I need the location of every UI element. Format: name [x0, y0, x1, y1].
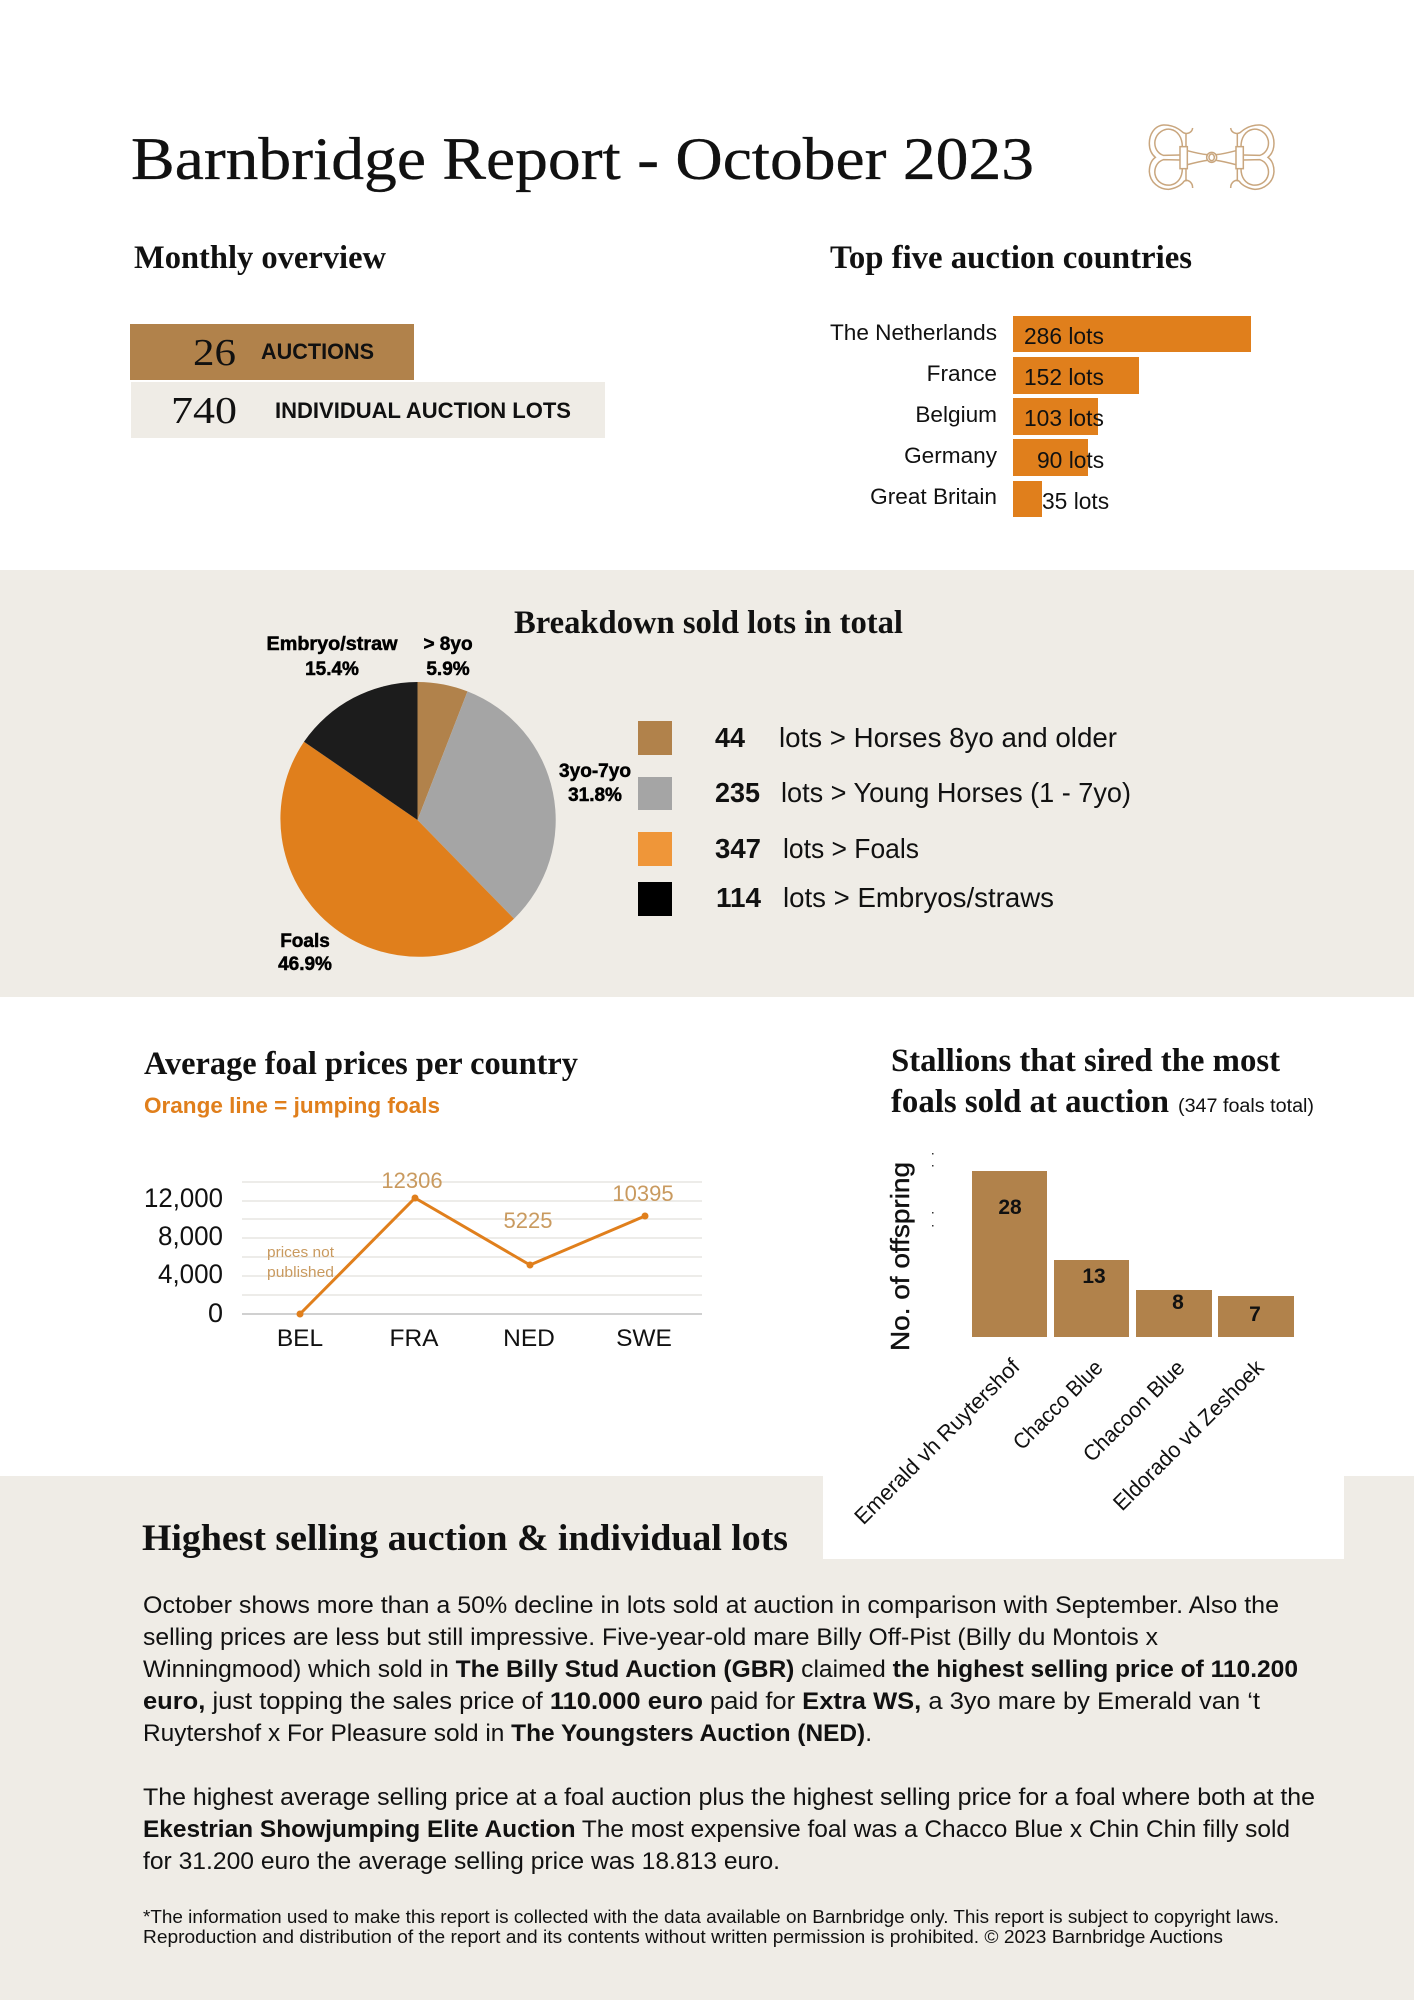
legend: lots > Embryos/straws: [783, 882, 1054, 913]
text block: paragraph one: Ruytershof x For Pleasure sold in The Youngsters Auction (NED) .: [143, 1720, 872, 1747]
heading: stallions that sired the most foals: foals sold at auction: [891, 1084, 1169, 1120]
panel: breakdown sold lots: [0, 570, 1414, 997]
text block: paragraph two: [143, 1784, 1315, 1875]
bar chart: offspring: No. of offspring: [885, 1162, 915, 1351]
bar chart: countries: 103 lots: [1024, 405, 1104, 431]
footnote: *The information used to make this report is collected with the data available on Barnbridge only. This report is subject to copyright laws.: [143, 1907, 1279, 1927]
bar chart: countries: [830, 316, 1251, 517]
panel: monthly overview: [130, 240, 605, 438]
bar chart: countries: 35 lots: [1042, 488, 1109, 514]
panel: stallions: [849, 1043, 1314, 1529]
legend: lots > Foals: [783, 833, 919, 864]
bar chart: offspring: 8: [1172, 1291, 1184, 1314]
line chart: published: [267, 1264, 334, 1281]
line chart: prices not: [267, 1244, 335, 1261]
legend: 347: [715, 833, 761, 864]
bar chart: offspring: Chacoon Blue: [1078, 1355, 1190, 1467]
line chart: BEL: [277, 1325, 323, 1352]
stat: auctions: AUCTIONS: [261, 339, 374, 364]
line chart: 4,000: [158, 1259, 223, 1289]
footnote: [143, 1907, 1279, 1947]
subheading: orange line note: Orange line = jumping foals: [144, 1093, 440, 1118]
line chart: 8,000: [158, 1221, 223, 1251]
title: Barnbridge Report - October 2023: [131, 126, 1034, 192]
legend: lots > Horses 8yo and older: [779, 722, 1117, 753]
bar chart: offspring: 28: [998, 1196, 1022, 1219]
heading: breakdown sold lots in total: Breakdown sold lots in total: [514, 605, 903, 641]
bar chart: offspring: Chacco Blue: [1008, 1355, 1108, 1455]
legend: [638, 721, 1131, 916]
bar chart: offspring: 13: [1082, 1265, 1106, 1288]
heading: monthly overview: Monthly overview: [134, 240, 386, 276]
stat: individual auction lots: [131, 382, 605, 438]
bar chart: countries: Belgium: [915, 402, 997, 427]
bar chart: offspring: Emerald vh Ruytershof: [849, 1353, 1025, 1529]
line chart: FRA: [390, 1325, 439, 1352]
heading: stallions that sired the most foals: (347 foals total): [1178, 1096, 1314, 1117]
heading: average foal prices per country: Average foal prices per country: [144, 1046, 578, 1082]
pie chart: 15.4%: [305, 659, 359, 680]
legend: lots > Young Horses (1 - 7yo): [781, 777, 1131, 808]
line chart: 12,000: [144, 1183, 223, 1213]
text block: paragraph two: The highest average selling price at a foal auction plus the highest selling price for a foal where both at the: [143, 1784, 1315, 1811]
bar chart: countries: Great Britain: [870, 484, 997, 509]
text block: paragraph two: for 31.200 euro the average selling price was 18.813 euro.: [143, 1848, 780, 1875]
heading: stallions that sired the most foals: [891, 1043, 1314, 1120]
bar chart: countries: 90 lots: [1037, 447, 1104, 473]
bar chart: offspring: Eldorado vd Zeshoek: [1108, 1354, 1269, 1515]
legend: 44: [715, 722, 745, 753]
bar chart: countries: France: [927, 361, 997, 386]
legend: 114: [716, 882, 761, 913]
pie chart: 31.8%: [568, 785, 622, 806]
pie chart: > 8yo: [423, 634, 473, 655]
bar chart: countries: Germany: [904, 443, 998, 468]
legend: 235: [715, 777, 760, 808]
pie chart: Embryo/straw: [266, 634, 398, 655]
heading: stallions that sired the most foals: Stallions that sired the most: [891, 1043, 1280, 1079]
bar chart: offspring: 7: [1249, 1303, 1261, 1326]
panel: average foal prices: [144, 1046, 702, 1352]
stat: auctions: 26: [193, 332, 236, 374]
text block: paragraph one: October shows more than a 50% decline in lots sold at auction in comparison with September. Also the: [143, 1592, 1279, 1619]
bar chart: offspring: [849, 1153, 1294, 1529]
line chart: NED: [503, 1325, 555, 1352]
text block: paragraph one: euro, just topping the sales price of 110.000 euro paid for Extra WS, a 3yo mare by Emerald van ‘t: [143, 1688, 1260, 1715]
text block: paragraph one: selling prices are less but still impressive. Five-year-old mare Billy Off-Pist (Billy du Montois x: [143, 1624, 1158, 1651]
pie chart: 3yo-7yo: [559, 761, 631, 782]
panel: highest selling auction: [0, 1476, 1414, 2000]
pie chart: 5.9%: [426, 659, 470, 680]
panel: top five auction countries: [830, 240, 1251, 517]
line chart: SWE: [616, 1325, 672, 1352]
line chart: 12306: [381, 1168, 443, 1193]
icon: snaffle bit logo: [1149, 125, 1274, 189]
line chart: 10395: [612, 1181, 674, 1206]
line chart: [144, 1168, 702, 1352]
text block: paragraph one: Winningmood) which sold in The Billy Stud Auction (GBR) claimed the highest selling price of 110.200: [143, 1656, 1298, 1683]
bar chart: countries: The Netherlands: [830, 320, 997, 345]
pie chart: 46.9%: [278, 954, 332, 975]
bar chart: countries: 152 lots: [1024, 364, 1104, 390]
stat: individual auction lots: 740: [171, 390, 237, 432]
text block: paragraph two: Ekestrian Showjumping Elite Auction The most expensive foal was a Chacco Blue x Chin Chin filly sold: [143, 1816, 1290, 1843]
line chart: 5225: [504, 1208, 552, 1233]
pie chart: Foals: [280, 931, 330, 952]
bar chart: countries: 286 lots: [1024, 323, 1104, 349]
stat: auctions: [130, 324, 414, 380]
heading: highest selling auction & individual lots: Highest selling auction & individual lots: [142, 1518, 788, 1559]
pie chart: [266, 634, 631, 975]
text block: paragraph one: [143, 1592, 1298, 1747]
heading: top five auction countries: Top five auction countries: [830, 240, 1192, 276]
line chart: 0: [208, 1298, 223, 1328]
stat: individual auction lots: INDIVIDUAL AUCTION LOTS: [275, 398, 571, 423]
footnote: Reproduction and distribution of the report and its contents without written permission is prohibited. © 2023 Barnbridge Auctions: [143, 1927, 1223, 1947]
